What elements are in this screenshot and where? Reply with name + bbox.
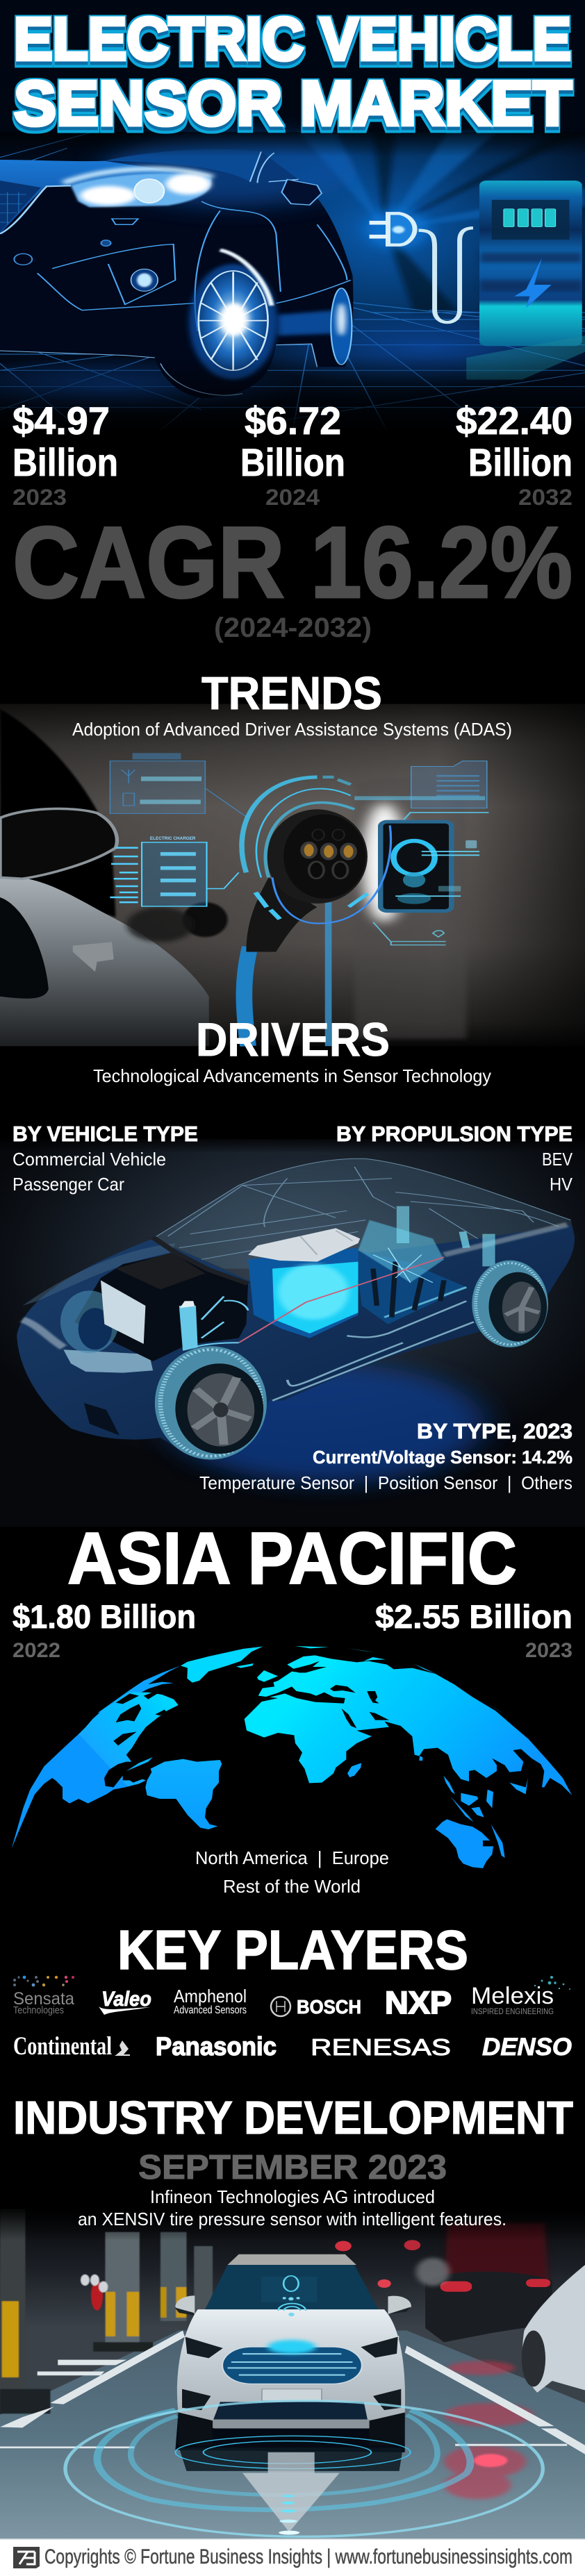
device screen: [381, 822, 479, 911]
icon: charging station panel: [466, 181, 585, 380]
world map globe: [12, 1646, 572, 1868]
trends description: Adoption of Advanced Driver Assistance Systems (ADAS): [72, 719, 512, 740]
lane markings: [0, 2330, 585, 2454]
logo: Continental: Continental: [13, 2032, 112, 2061]
logo: Sensata: Sensata: [13, 1989, 74, 2009]
logo: Sensata: Technologies: [13, 2004, 64, 2016]
stat: 2024 market value: Billion: [240, 440, 345, 484]
segment: by propulsion type: BEV: [542, 1149, 573, 1170]
right parked car: [522, 2265, 585, 2393]
parking pillars: [0, 2210, 213, 2413]
background car with red tail lights: [335, 2222, 552, 2342]
heading: asia pacific: ASIA PACIFIC: [67, 1518, 517, 1599]
stat: 2023 market value: 2023: [13, 485, 67, 510]
bright hood line: [63, 169, 213, 183]
connection status: [373, 922, 446, 945]
other regions list: [195, 1847, 389, 1897]
segment: by vehicle type: Commercial Vehicle: [13, 1149, 166, 1170]
segment: by propulsion type: BY PROPULSION TYPE: [336, 1122, 572, 1146]
HUD panel: electric charger: [110, 836, 239, 906]
stat: 2032 market value: $22.40: [456, 399, 572, 442]
fog lamp: [131, 269, 158, 291]
light rays: [299, 132, 585, 313]
stat: 2024 market value: [240, 399, 345, 510]
stat: 2024 market value: $6.72: [245, 399, 341, 442]
stat: asia pacific 2022: 2022: [13, 1639, 60, 1662]
logo: Panasonic: Panasonic: [156, 2032, 277, 2061]
development description: an XENSIV tire pressure sensor with intelligent features.: [78, 2209, 506, 2229]
logo: Bosch: [271, 1996, 361, 2018]
HUD icons: [278, 2276, 306, 2311]
segment: by vehicle type: BY VEHICLE TYPE: [13, 1122, 198, 1146]
panel: drivers image with car cutaway: [0, 1139, 585, 1527]
heading: drivers: DRIVERS: [196, 1013, 390, 1066]
segment: by type 2023: [199, 1419, 572, 1493]
development description: [78, 2186, 506, 2229]
sill pipe and frame: [272, 1301, 474, 1401]
holographic rings: [242, 777, 391, 924]
logo: Melexis: Melexis: [471, 1983, 554, 2009]
logo: Amphenol: Advanced Sensors: [174, 2004, 247, 2016]
stat: asia pacific 2023: $2.55 Billion: [375, 1598, 572, 1635]
stat: 2023 market value: Billion: [13, 440, 118, 484]
logo: Valeo: Valeo: [101, 1988, 151, 2011]
logo: Amphenol: Amphenol: [174, 1986, 247, 2006]
footer: [0, 2538, 585, 2576]
logo: Sensata: [13, 1976, 74, 2016]
right red lights on floor: [444, 2361, 534, 2499]
icon: Fortune Business Insights logo: [13, 2547, 40, 2568]
panel: trends image: [0, 704, 585, 1046]
segment: by type 2023: Current/Voltage Sensor: 14.2%: [313, 1447, 572, 1468]
icon: charging cable: [419, 228, 473, 322]
car glass cabin and roof: [153, 1158, 575, 1269]
other regions list: North America | Europe: [195, 1847, 389, 1868]
logo: Melexis: [471, 1976, 570, 2016]
stat: 2023 market value: $4.97: [13, 399, 110, 442]
development description: Infineon Technologies AG introduced: [150, 2186, 435, 2207]
segment: by vehicle type: [13, 1122, 198, 1195]
stat: asia pacific 2023: 2023: [525, 1639, 572, 1662]
stat: 2032 market value: Billion: [468, 440, 572, 484]
headlight: [71, 174, 211, 207]
logo: Amphenol: [174, 1986, 247, 2016]
road surface: [0, 2330, 585, 2538]
stat: asia pacific 2022: $1.80 Billion: [13, 1598, 196, 1635]
map: americas: [12, 1647, 263, 1849]
development date: SEPTEMBER 2023: [138, 2149, 447, 2186]
car body: [17, 1224, 575, 1451]
stat: asia pacific 2023: [375, 1598, 572, 1662]
front wheel: [189, 264, 277, 380]
stat: 2024 market value: 2024: [265, 485, 320, 510]
panel: parking assist image: [0, 2210, 585, 2538]
charger plug: [267, 809, 368, 904]
heading: key players: KEY PLAYERS: [117, 1919, 468, 1981]
HUD panel: info card: [354, 761, 488, 831]
segment: by vehicle type: Passenger Car: [13, 1174, 124, 1195]
front wheel: [155, 1346, 267, 1460]
drivers description: Technological Advancements in Sensor Technology: [93, 1065, 491, 1086]
stat: 2032 market value: [456, 399, 572, 510]
logo: Renesas: RENESAS: [311, 2034, 451, 2060]
HUD panel: clean energy: [110, 753, 246, 817]
segment: by propulsion type: [336, 1122, 573, 1195]
segment: by type 2023: BY TYPE, 2023: [417, 1419, 572, 1443]
logo: Melexis: INSPIRED ENGINEERING: [471, 2006, 554, 2016]
HUD panel: electric charger: ELECTRIC CHARGER: [150, 836, 195, 841]
mirror: [281, 179, 322, 205]
charger cable: [244, 877, 329, 1046]
title: ELECTRIC VEHICLE: [14, 6, 571, 73]
icon: plug: [365, 210, 429, 249]
logo: NXP: NXP: [385, 1985, 452, 2020]
heading: trends: TRENDS: [201, 667, 382, 720]
title backdrop: [0, 0, 585, 132]
car outlines: [0, 151, 351, 395]
stat: asia pacific 2022: [13, 1598, 196, 1662]
hero illustration: glowing electric car and charger: [0, 132, 585, 442]
logo: Denso: DENSO: [482, 2034, 572, 2061]
white SUV: [174, 2254, 411, 2445]
logo: Bosch: BOSCH: [297, 1996, 361, 2018]
grid floor: [0, 132, 585, 440]
arrow on floor: [242, 2452, 340, 2535]
sensor rings: [65, 2401, 543, 2536]
rear mechanicals: [354, 1206, 488, 1324]
title: [14, 6, 572, 139]
pillar behind charger: [354, 778, 466, 1039]
CAGR period: (2024-2032): [214, 613, 372, 643]
icon: car body: [0, 132, 359, 398]
map: europe, africa, asia, oceania: [245, 1646, 572, 1868]
other regions list: Rest of the World: [223, 1876, 361, 1897]
battery block: [239, 1228, 444, 1343]
title: SENSOR MARKET: [14, 69, 572, 139]
stat: 2023 market value: [13, 399, 118, 510]
hex grille: [0, 192, 26, 224]
rear wheel: [472, 1261, 548, 1347]
car under-shadow: [175, 2413, 405, 2452]
segment: by propulsion type: HV: [550, 1174, 573, 1195]
car silhouette: [0, 709, 228, 1046]
segment: by type 2023: Temperature Sensor | Position Sensor | Others: [199, 1472, 572, 1493]
rear wheel and sill glow: [278, 310, 340, 335]
front bumper and lamp: [22, 1320, 153, 1436]
stat: 2032 market value: 2032: [518, 485, 572, 510]
engine bay: [60, 1238, 248, 1361]
